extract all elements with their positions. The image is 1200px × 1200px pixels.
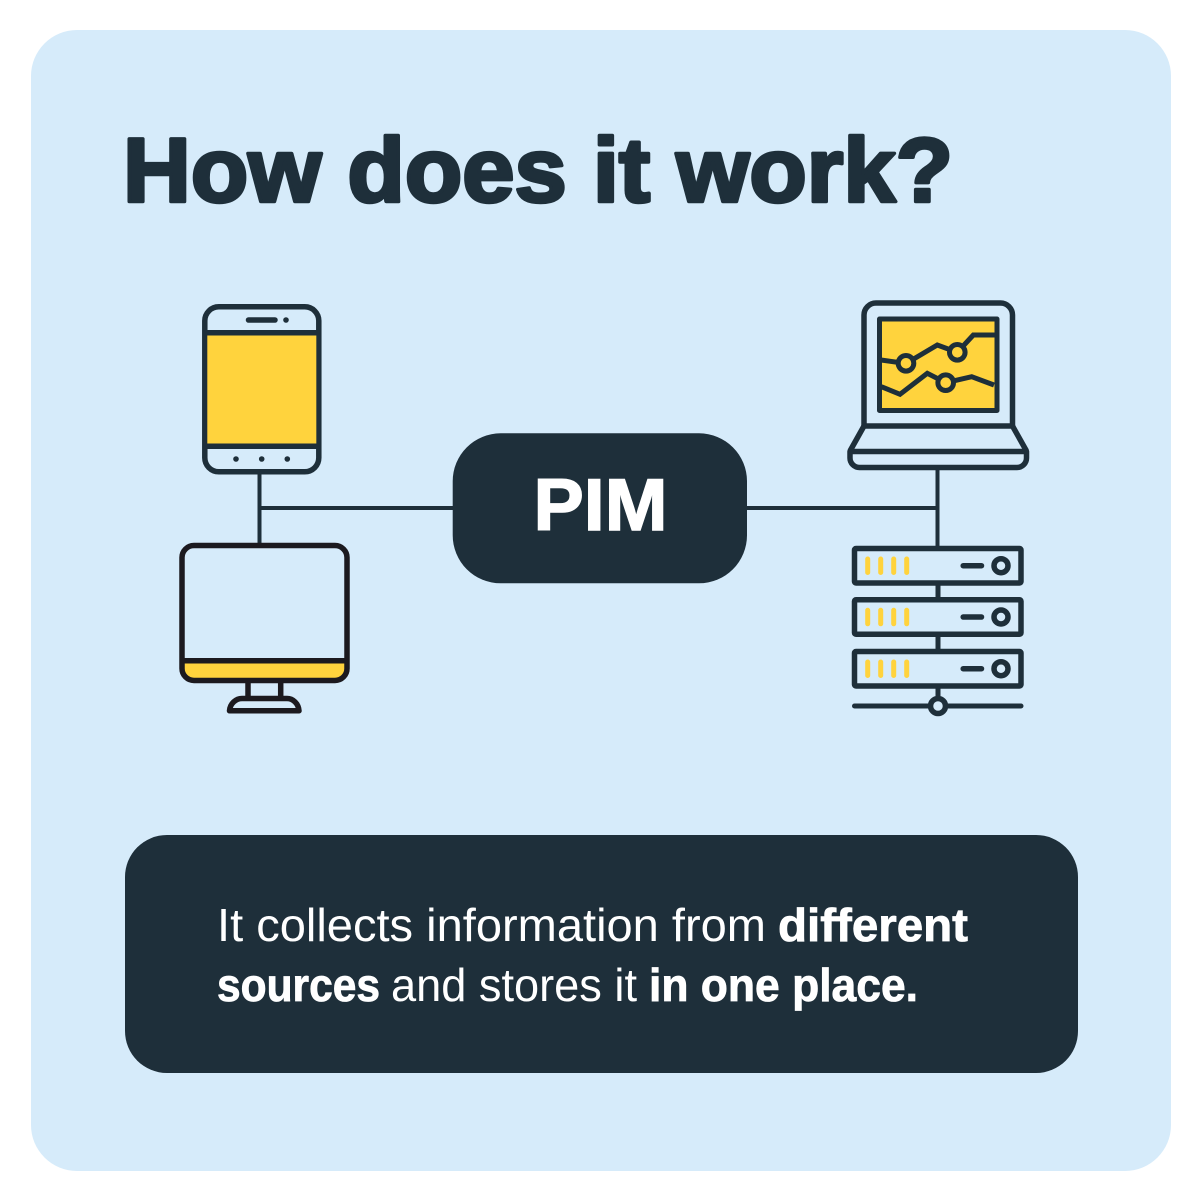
title: How does it work? xyxy=(123,120,953,222)
icon: desktop monitor xyxy=(182,546,347,711)
icon: laptop with chart xyxy=(850,303,1026,468)
server unit 2 xyxy=(854,600,1021,634)
server unit 1 xyxy=(854,548,1021,583)
network base line xyxy=(854,698,1021,714)
callout panel xyxy=(125,835,1078,1073)
callout text: sources xyxy=(217,959,380,1011)
callout text: different xyxy=(778,899,968,951)
callout text xyxy=(217,899,968,1011)
PIM badge: PIM xyxy=(534,465,668,546)
PIM badge xyxy=(453,433,747,583)
icon: server rack xyxy=(854,548,1021,714)
server unit 3 xyxy=(854,652,1021,686)
callout text: in one place. xyxy=(649,959,918,1011)
callout text: It collects information from xyxy=(217,899,766,951)
connector lines xyxy=(260,468,938,548)
callout text: and stores it xyxy=(391,959,637,1011)
icon: smartphone xyxy=(205,307,319,472)
